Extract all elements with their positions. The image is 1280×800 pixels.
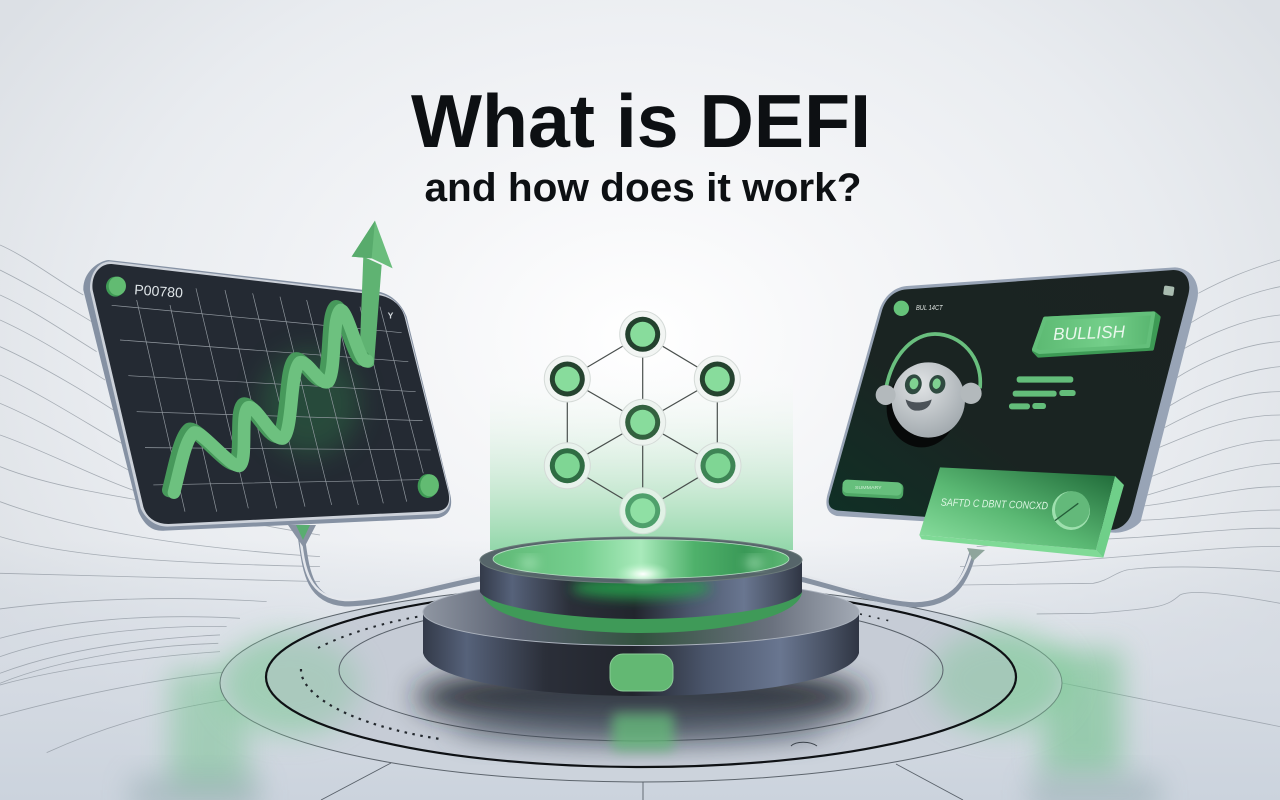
panel face (92, 264, 449, 524)
panel: right sentiment (826, 267, 1198, 558)
base top (423, 578, 859, 646)
outer disc (220, 584, 1062, 782)
base button (610, 654, 673, 691)
panel face (829, 270, 1189, 530)
panel label: BUL 14CT (916, 303, 943, 312)
pill reflection (612, 713, 674, 751)
tick marks (318, 616, 422, 648)
corner icon (1163, 285, 1175, 296)
avatar shadow (887, 369, 957, 447)
bullish button (1034, 313, 1159, 356)
black ring (266, 587, 1016, 767)
text placeholder bars (1009, 376, 1076, 409)
coin (1052, 491, 1090, 530)
card underside (919, 535, 1103, 558)
dot bottom right (418, 474, 439, 498)
growth arrow (352, 221, 393, 368)
platform upper disc (480, 537, 802, 633)
node lower left (544, 443, 590, 489)
hologram beam (490, 360, 793, 550)
card side (1096, 476, 1124, 558)
side glow (571, 577, 711, 599)
green ring (482, 592, 802, 633)
subheading: and how does it work? (424, 166, 862, 210)
node top (620, 311, 666, 357)
floor radial lines (321, 763, 963, 800)
inner ring (339, 599, 943, 741)
connector: right panel stand (800, 548, 985, 604)
card text: SAFTD C DBNT CONCXD (941, 497, 1048, 512)
panel frame (826, 267, 1198, 533)
heading: what is defi: What is DEFI (411, 79, 871, 163)
small green button: SUMMARY (855, 485, 882, 490)
card face (919, 467, 1115, 550)
base side (423, 612, 859, 696)
node upper right (694, 356, 740, 402)
bullish button: BULLISH (1053, 321, 1126, 344)
network diagram (544, 311, 741, 534)
status dot (894, 301, 909, 316)
floor green glow reflections (130, 650, 1160, 800)
platform shadow and reflection (415, 663, 865, 751)
small label: Y (388, 310, 394, 320)
panel: left chart (83, 221, 451, 531)
small green button (842, 479, 904, 499)
lens highlights (520, 558, 538, 568)
floor rings (220, 584, 1070, 800)
ears (876, 385, 896, 405)
chart grid (112, 288, 437, 512)
node bottom (620, 488, 666, 534)
eyes (903, 373, 924, 396)
small ring mark (791, 742, 817, 746)
growth line (169, 307, 367, 493)
head (892, 362, 965, 438)
title (411, 79, 871, 210)
network links (567, 334, 718, 511)
background contour lines left (0, 245, 320, 753)
green lens (493, 540, 789, 578)
node lower right (695, 443, 741, 489)
panel label: P00780 (134, 281, 184, 301)
green card (919, 467, 1124, 558)
chart glow (260, 350, 360, 457)
node centre (620, 399, 666, 445)
dot top left (106, 277, 126, 297)
platform base disc (423, 578, 859, 696)
upper side (480, 560, 802, 619)
rim (480, 537, 802, 583)
robot avatar (876, 334, 982, 447)
panel frame (83, 260, 451, 531)
centre spark (615, 562, 671, 586)
mouth (906, 399, 932, 411)
ring glows (220, 635, 360, 735)
headband (886, 334, 980, 388)
node upper left (544, 356, 590, 402)
connector: left panel stand (288, 525, 480, 603)
background contour lines right (960, 260, 1280, 727)
